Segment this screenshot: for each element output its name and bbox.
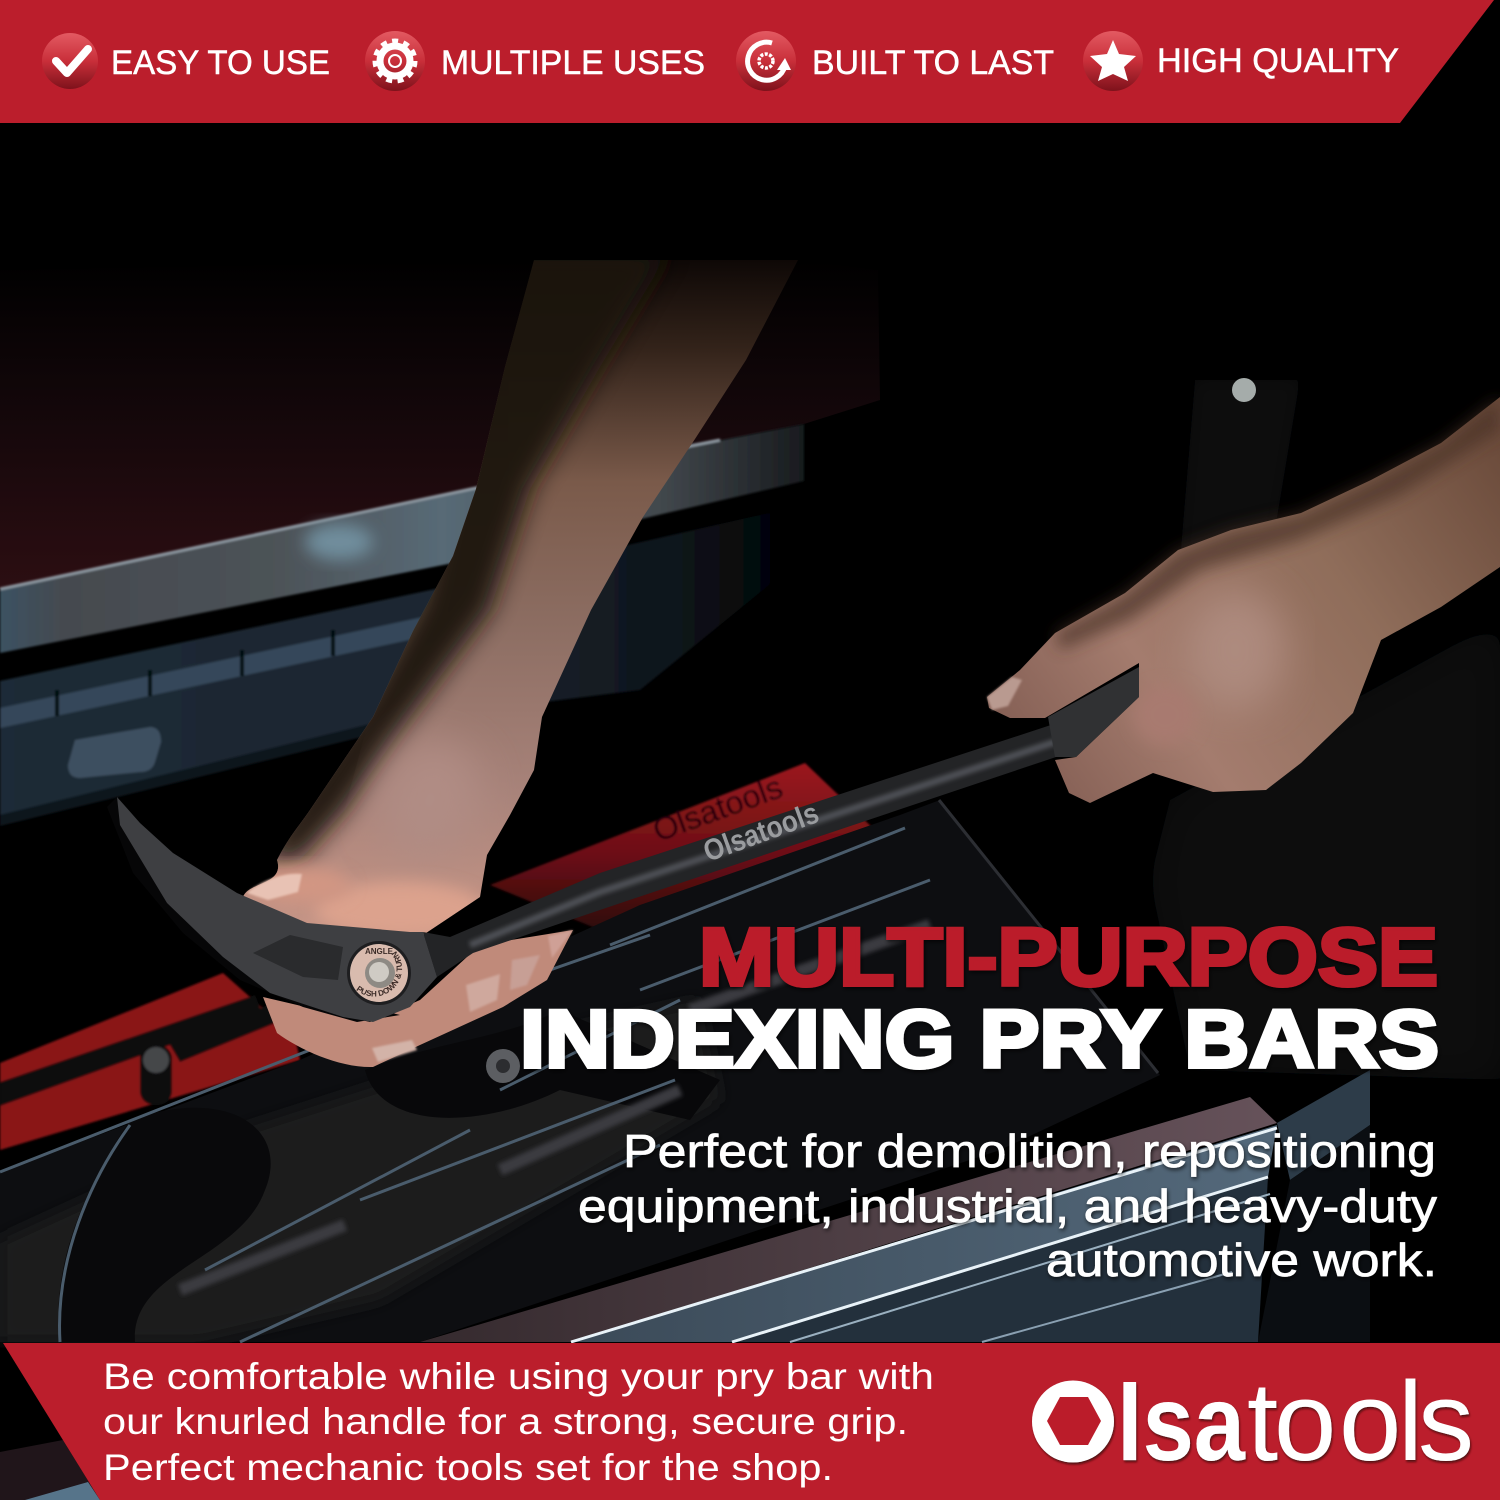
hand top shadow: [1055, 397, 1500, 650]
comfort text: [103, 1356, 934, 1488]
logo: lsa: [1117, 1362, 1246, 1483]
knuckle highlight: [1133, 685, 1197, 745]
comfort text: Perfect mechanic tools set for the shop.: [103, 1447, 833, 1488]
headline: MULTI-PURPOSE: [699, 912, 1438, 1003]
feature: built to last: [736, 31, 1054, 91]
background: shirt snap button: [1232, 378, 1256, 402]
feature: easy to use: EASY TO USE: [111, 44, 330, 82]
background: maroon toolbox wall: [0, 260, 880, 589]
comfort text: Be comfortable while using your pry bar with: [103, 1356, 934, 1397]
foam edge lines: [0, 828, 930, 1342]
headline: INDEXING PRY BARS: [520, 994, 1439, 1085]
arm shadow side: [250, 250, 670, 938]
bottom banner: [3, 1343, 1500, 1500]
lower fingers: [263, 930, 573, 1067]
feature: easy to use: [42, 33, 330, 89]
top banner: [0, 0, 1494, 123]
shaft: [423, 722, 1062, 977]
background: shirt placket: [1180, 380, 1300, 560]
tray side edge: [939, 800, 1158, 1073]
blade outer underside: [107, 797, 400, 1022]
thumb nail: [247, 874, 302, 900]
background: blue-grey drawer panel: [0, 508, 800, 826]
comfort text: our knurled handle for a strong, secure grip.: [103, 1401, 908, 1442]
pry bar: [117, 667, 1139, 1022]
description text: automotive work.: [1046, 1234, 1437, 1286]
background: lower steel drawer: [420, 1070, 1370, 1342]
background: red tray label: Olsatools: [648, 769, 787, 849]
description text: Perfect for demolition, repositioning: [623, 1125, 1436, 1177]
feature: built to last: BUILT TO LAST: [812, 44, 1054, 82]
logo: O: [1031, 1362, 1115, 1485]
description text: [578, 1125, 1437, 1286]
logo: [1031, 1359, 1474, 1485]
headline: [520, 912, 1439, 1085]
feature: multiple uses: [365, 31, 705, 91]
background: lower shirt: [1150, 620, 1500, 1080]
right arm and hand: [987, 397, 1500, 803]
bar logo: Olsatools: [699, 797, 823, 869]
indexing rivet: PUSH DOWN & TURN: [356, 951, 402, 996]
background: foam tool tray: [0, 800, 1160, 1342]
left arm and hand: [243, 250, 798, 1067]
background: red tray strips: [0, 973, 300, 1150]
background: upper steel drawer edge: [0, 424, 804, 653]
handle grip: [1048, 667, 1139, 757]
right hand highlight: [1185, 590, 1285, 710]
socket bars: [180, 925, 930, 1290]
description text: equipment, industrial, and heavy-duty: [578, 1180, 1437, 1232]
background: lower-left corner steel: [0, 1440, 100, 1500]
background: red tray label: [490, 763, 875, 930]
indexing rivet: [347, 941, 411, 1005]
head and curved blade: [117, 797, 437, 1022]
logo: tools: [1247, 1359, 1474, 1484]
feature: multiple uses: MULTIPLE USES: [441, 44, 705, 82]
head recess: [253, 935, 343, 980]
indexing rivet: ANGLE: [365, 947, 394, 956]
thumb nail: [987, 677, 1022, 710]
feature: high quality: HIGH QUALITY: [1157, 42, 1399, 80]
feature: high quality: [1083, 31, 1399, 91]
